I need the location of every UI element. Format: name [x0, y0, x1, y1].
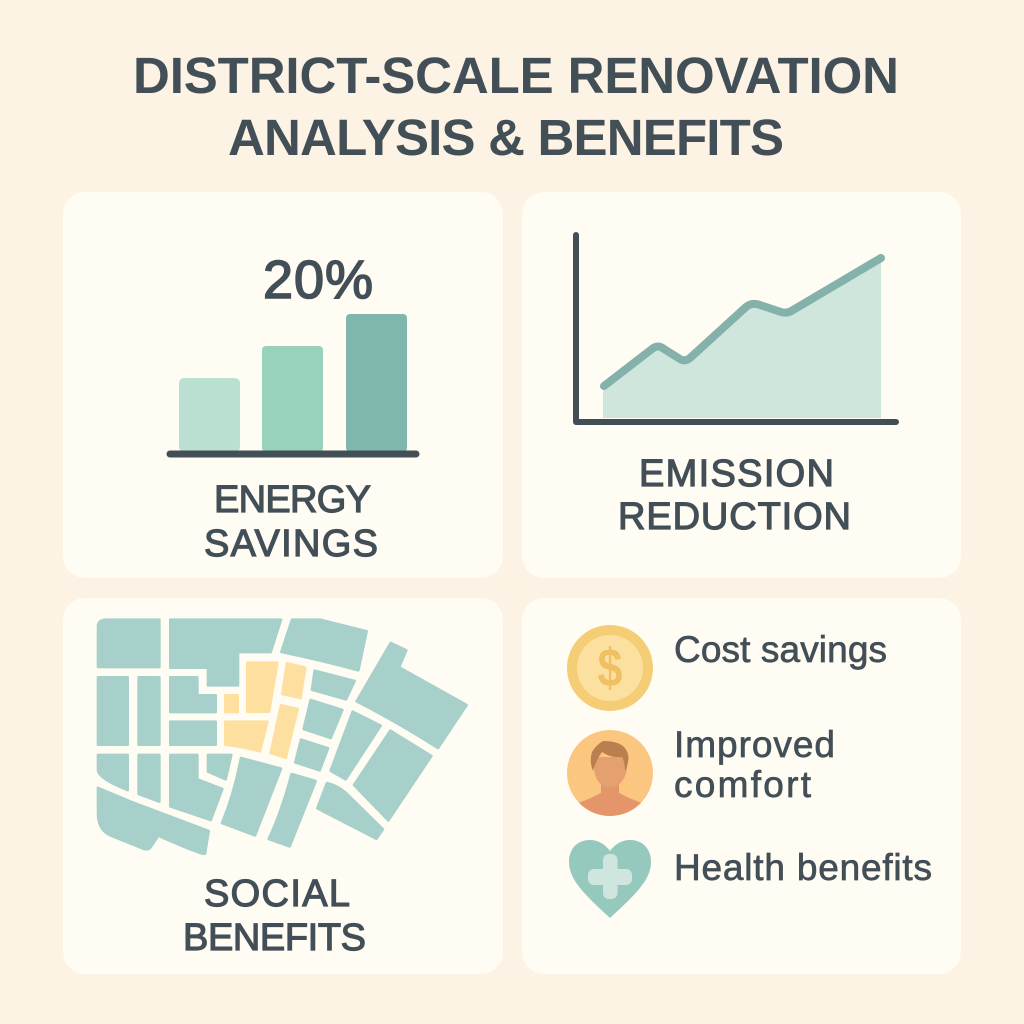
- icon: coin: $: [598, 638, 622, 698]
- label: social benefits: BENEFITS: [183, 917, 366, 959]
- panel: emission reduction: [522, 192, 961, 578]
- panel: benefits list: [522, 598, 961, 974]
- title: DISTRICT-SCALE RENOVATION: [133, 47, 899, 104]
- text: improved comfort: [674, 724, 835, 805]
- district map: [98, 620, 467, 854]
- label: social benefits: [183, 873, 366, 959]
- label: emission reduction: [618, 453, 851, 538]
- bar chart: [170, 314, 416, 454]
- area line chart: [576, 235, 896, 422]
- big number: 20%: 20%: [263, 250, 373, 310]
- panel: social benefits: [63, 598, 503, 974]
- title: ANALYSIS & BENEFITS: [228, 109, 784, 166]
- label: energy savings: SAVINGS: [204, 523, 378, 565]
- icon: coin: [567, 625, 653, 711]
- label: emission reduction: EMISSION: [639, 453, 834, 495]
- label: energy savings: ENERGY: [214, 479, 371, 521]
- text: improved comfort: Improved: [674, 724, 835, 765]
- icon: person: [567, 730, 653, 825]
- label: energy savings: [204, 479, 378, 565]
- text: health benefits: Health benefits: [674, 847, 932, 888]
- title: [133, 47, 899, 166]
- text: improved comfort: comfort: [674, 764, 812, 805]
- label: social benefits: SOCIAL: [204, 873, 350, 915]
- panel: energy savings: [63, 192, 503, 578]
- text: cost savings: Cost savings: [674, 629, 887, 670]
- highlighted renovated blocks: [225, 663, 305, 758]
- icon: heart with cross: [569, 840, 651, 918]
- label: emission reduction: REDUCTION: [618, 496, 851, 538]
